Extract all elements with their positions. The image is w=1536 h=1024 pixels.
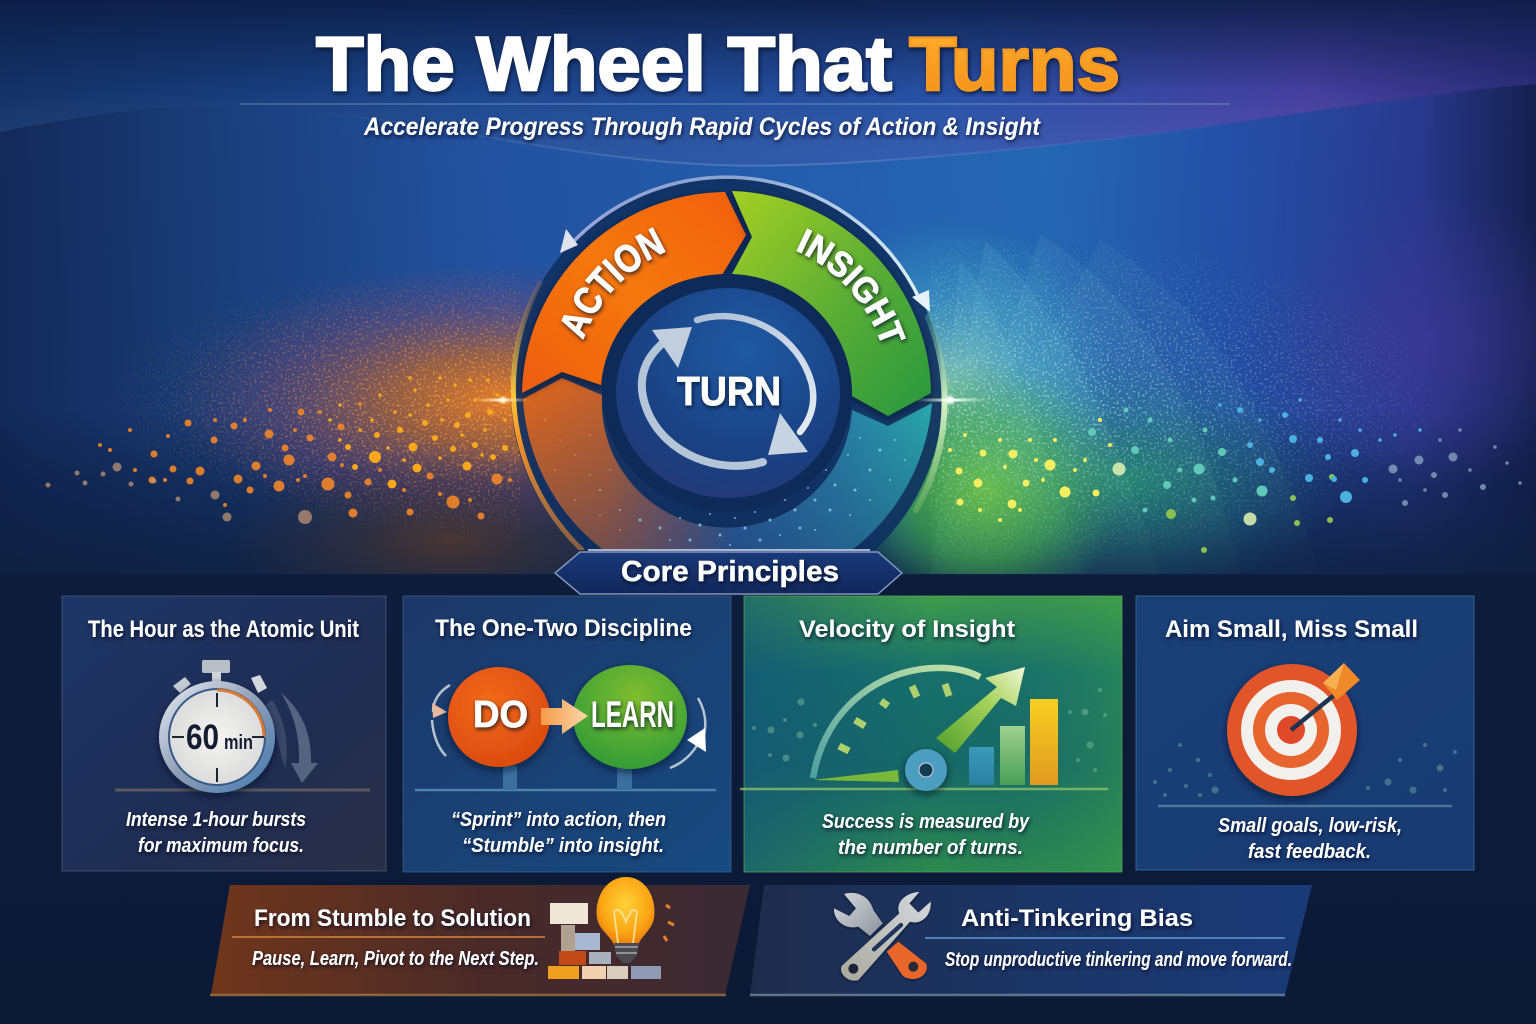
section heading: core principles: Core Principles [621, 556, 839, 588]
heading: From Stumble to Solution [254, 905, 531, 932]
caption: fast feedback. [1248, 841, 1371, 863]
card 1: the hour [62, 596, 386, 871]
segment: action [518, 191, 748, 399]
heading: Anti-Tinkering Bias [961, 905, 1193, 932]
card 2: the one-two discipline [403, 596, 731, 872]
caption: Stop unproductive tinkering and move forward. [945, 949, 1292, 971]
title [316, 22, 1120, 107]
icon: bricks and lightbulb [548, 877, 674, 979]
segment: insight [728, 190, 935, 422]
caption [822, 811, 1030, 859]
caption: Success is measured by [822, 811, 1030, 833]
label: insight: INSIGHT [795, 228, 909, 345]
card 4: aim small [1136, 596, 1474, 870]
label: action: ACTION [560, 226, 669, 344]
heading: The One-Two Discipline [435, 615, 692, 642]
panel: anti-tinkering bias [750, 885, 1312, 995]
icon: do to learn: DO [473, 694, 528, 736]
background [0, 84, 1536, 574]
panel: from stumble to solution [200, 877, 750, 995]
flares [470, 396, 990, 404]
icon: target [1227, 663, 1360, 796]
turn label: TURN [677, 368, 781, 414]
icon: stopwatch: 60 [186, 718, 219, 757]
title: The Wheel That [316, 22, 892, 107]
icon: do to learn: LEARN [591, 694, 674, 735]
particles: orange field [48, 270, 520, 560]
caption: Pause, Learn, Pivot to the Next Step. [252, 948, 539, 970]
wheel [510, 175, 948, 550]
outer arc left [513, 281, 583, 551]
card 3: velocity of insight [740, 596, 1122, 872]
top arc with arrowheads [560, 177, 930, 312]
outer arc right [916, 317, 945, 510]
icon: crossed wrenches [834, 892, 931, 981]
caption: the number of turns. [838, 837, 1023, 859]
caption [126, 809, 306, 857]
section heading: core principles [60, 550, 1495, 594]
lower ring segments [523, 378, 932, 550]
caption [451, 809, 666, 857]
title: Turns [909, 22, 1120, 107]
heading: The Hour as the Atomic Unit [88, 616, 359, 643]
caption: “Stumble” into insight. [462, 835, 664, 857]
chart: speedometer and bars [740, 667, 1108, 791]
icon: stopwatch: min [224, 732, 253, 754]
particles: green and blue field [930, 240, 1520, 560]
caption: Intense 1-hour bursts [126, 809, 306, 831]
heading: Velocity of Insight [799, 616, 1015, 643]
center hub [602, 274, 852, 512]
icon: do to learn [432, 665, 706, 790]
icon: stopwatch [159, 660, 318, 793]
caption: for maximum focus. [138, 835, 304, 857]
header band [0, 0, 1536, 166]
wheel base disc [511, 178, 943, 550]
turn arrows [642, 316, 813, 466]
caption: “Sprint” into action, then [451, 809, 666, 831]
subtitle: Accelerate Progress Through Rapid Cycles of Action & Insight [363, 113, 1042, 141]
caption [1218, 815, 1402, 863]
caption: Small goals, low-risk, [1218, 815, 1402, 837]
heading: Aim Small, Miss Small [1165, 616, 1418, 643]
